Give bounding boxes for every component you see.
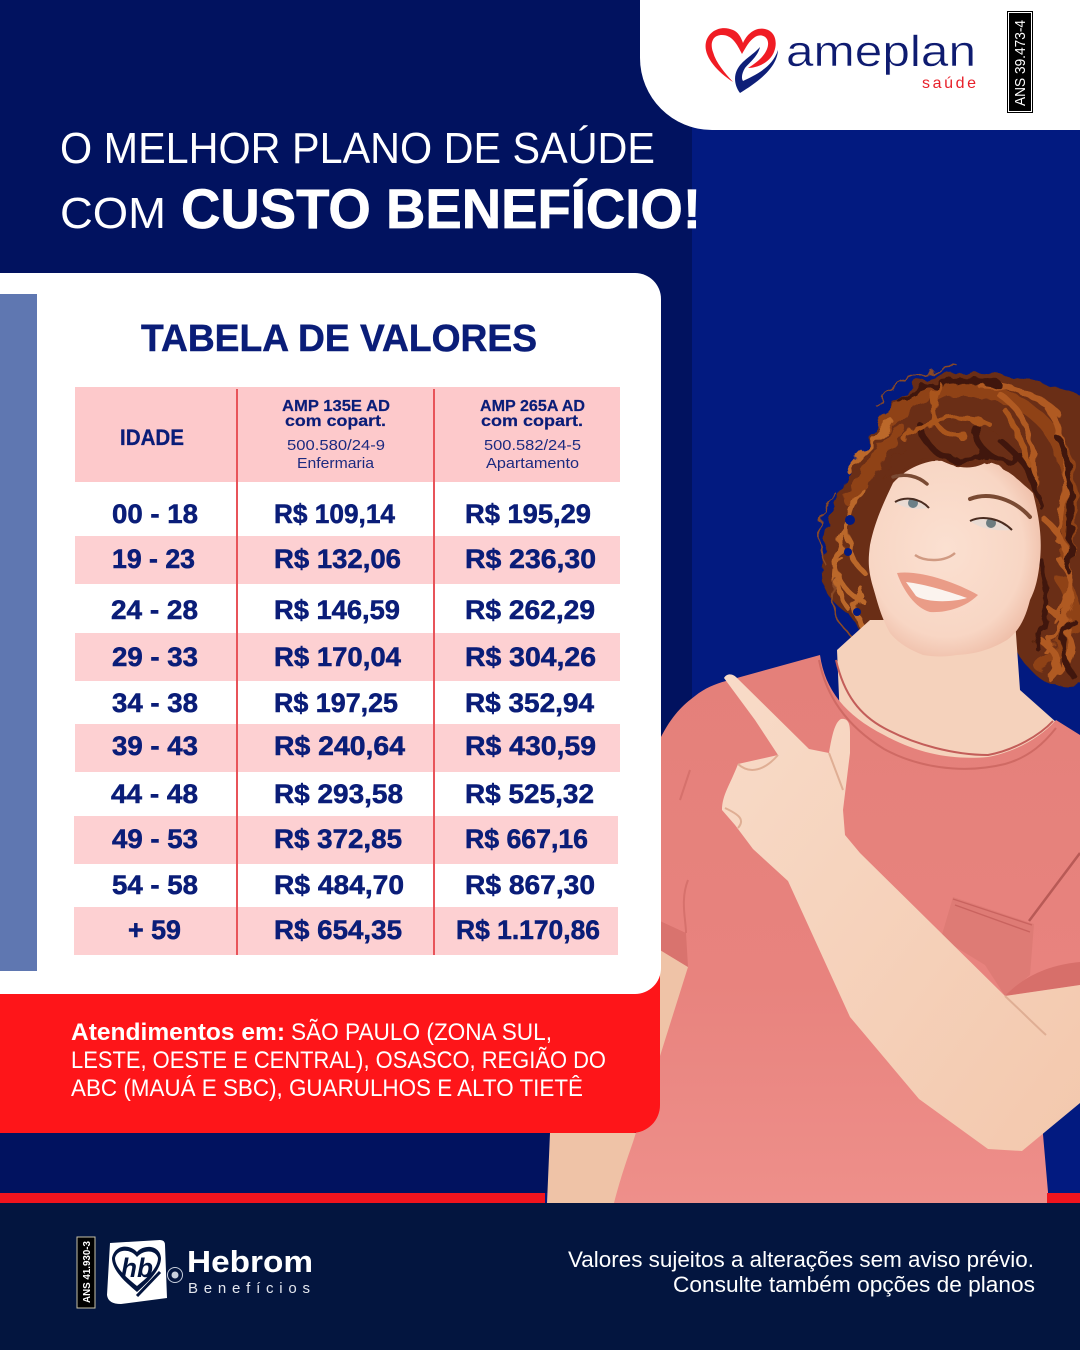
headline: O MELHOR PLANO DE SAÚDE: [60, 124, 655, 173]
left arm behind panel: [547, 950, 700, 1203]
row +59: [128, 915, 600, 945]
footer band: [0, 1203, 1080, 1350]
row 44-48: [111, 779, 594, 809]
row 29-33: R$ 170,04: [274, 642, 401, 672]
ANS badge: [1007, 11, 1033, 113]
table header: IDADE: [120, 425, 184, 450]
headline: COM: [60, 189, 166, 238]
hair back mass: [819, 368, 1080, 687]
headline: [60, 124, 701, 240]
white table panel: [0, 273, 661, 994]
table header: Apartamento: [486, 456, 579, 472]
row 39-43: R$ 240,64: [274, 731, 405, 761]
logo card: [640, 0, 1080, 130]
table header: [75, 387, 620, 482]
table title: TABELA DE VALORES: [141, 318, 537, 360]
row 49-53: R$ 667,16: [465, 824, 588, 854]
row 44-48: 44 - 48: [111, 779, 198, 809]
row 29-33: 29 - 33: [112, 642, 198, 672]
striped row backgrounds: [74, 536, 620, 955]
row 19-23: R$ 132,06: [274, 544, 401, 574]
neck: [837, 620, 1056, 785]
hair fringe over forehead: [885, 385, 1040, 505]
row 19-23: R$ 236,30: [465, 544, 596, 574]
column dividers: [236, 389, 435, 955]
Hebrom name: Hebrom: [187, 1244, 313, 1279]
row 34-38: [112, 688, 594, 718]
price table: [74, 387, 620, 955]
service area text: LESTE, OESTE E CENTRAL), OSASCO, REGIÃO DO: [71, 1047, 606, 1074]
row 39-43: R$ 430,59: [465, 731, 596, 761]
face: [869, 460, 1041, 656]
service area text: SÃO PAULO (ZONA SUL,: [291, 1019, 552, 1046]
ANS badge: ANS 39.473-4: [1013, 20, 1029, 106]
row 00-18: R$ 109,14: [274, 499, 395, 529]
logo tagline: saúde: [922, 75, 976, 92]
row 44-48: R$ 293,58: [274, 779, 403, 809]
table header: Enfermaria: [297, 456, 375, 472]
row 34-38: 34 - 38: [112, 688, 198, 718]
row 00-18: [112, 499, 591, 529]
row 39-43: [112, 731, 596, 761]
row 00-18: 00 - 18: [112, 499, 198, 529]
table header: com copart.: [481, 413, 583, 430]
icon: ameplan heart: [706, 28, 778, 93]
row 24-28: R$ 146,59: [274, 595, 400, 625]
service area text: [71, 1019, 606, 1102]
row 54-58: 54 - 58: [112, 870, 198, 900]
table header: AMP 135E AD: [282, 398, 390, 415]
table header: 500.582/24-5: [484, 438, 581, 454]
ANS badge: Hebrom: [77, 1237, 95, 1308]
row 44-48: R$ 525,32: [465, 779, 594, 809]
row 54-58: [112, 870, 595, 900]
row 34-38: R$ 352,94: [465, 688, 594, 718]
row 49-53: 49 - 53: [112, 824, 198, 854]
row 24-28: [111, 595, 595, 625]
footer disclaimer: Valores sujeitos a alterações sem aviso prévio.: [568, 1247, 1034, 1272]
service area text: ABC (MAUÁ E SBC), GUARULHOS E ALTO TIETÊ: [71, 1075, 583, 1102]
gaps between curls: [844, 515, 861, 616]
icon: Hebrom logo mark: hb: [121, 1253, 153, 1283]
row 00-18: R$ 195,29: [465, 499, 591, 529]
row 54-58: R$ 484,70: [274, 870, 404, 900]
row +59: + 59: [128, 915, 181, 945]
row 24-28: 24 - 28: [111, 595, 198, 625]
red strip above footer: [0, 1193, 1080, 1203]
row 34-38: R$ 197,25: [274, 688, 398, 718]
service area text: Atendimentos em:: [71, 1019, 285, 1046]
logo wordmark: ameplan: [786, 27, 976, 76]
row 49-53: R$ 372,85: [274, 824, 402, 854]
table header: 500.580/24-9: [287, 438, 385, 454]
row 29-33: R$ 304,26: [465, 642, 596, 672]
row 24-28: R$ 262,29: [465, 595, 595, 625]
ANS badge: Hebrom: ANS 41.930-3: [81, 1241, 93, 1303]
row 19-23: [112, 544, 596, 574]
raised arm and hand: [722, 674, 1080, 1151]
Hebrom tagline: Benefícios: [188, 1280, 310, 1297]
row 49-53: [112, 824, 588, 854]
row +59: R$ 654,35: [274, 915, 402, 945]
table header: com copart.: [285, 413, 386, 430]
headline: CUSTO BENEFÍCIO!: [181, 177, 701, 240]
row 19-23: 19 - 23: [112, 544, 195, 574]
left blue accent bar: [0, 294, 37, 971]
photo: smiling woman pointing: [547, 368, 1080, 1203]
row 54-58: R$ 867,30: [465, 870, 595, 900]
hand creases: [725, 753, 1046, 1035]
footer disclaimer: [568, 1247, 1035, 1297]
pink shirt: [614, 655, 1080, 1203]
row 29-33: [112, 642, 596, 672]
icon: Hebrom logo mark: [107, 1240, 182, 1304]
row 39-43: 39 - 43: [112, 731, 198, 761]
row +59: R$ 1.170,86: [456, 915, 600, 945]
red service area panel: [0, 960, 660, 1133]
footer disclaimer: Consulte também opções de planos: [673, 1272, 1035, 1297]
table header: AMP 265A AD: [480, 398, 585, 415]
